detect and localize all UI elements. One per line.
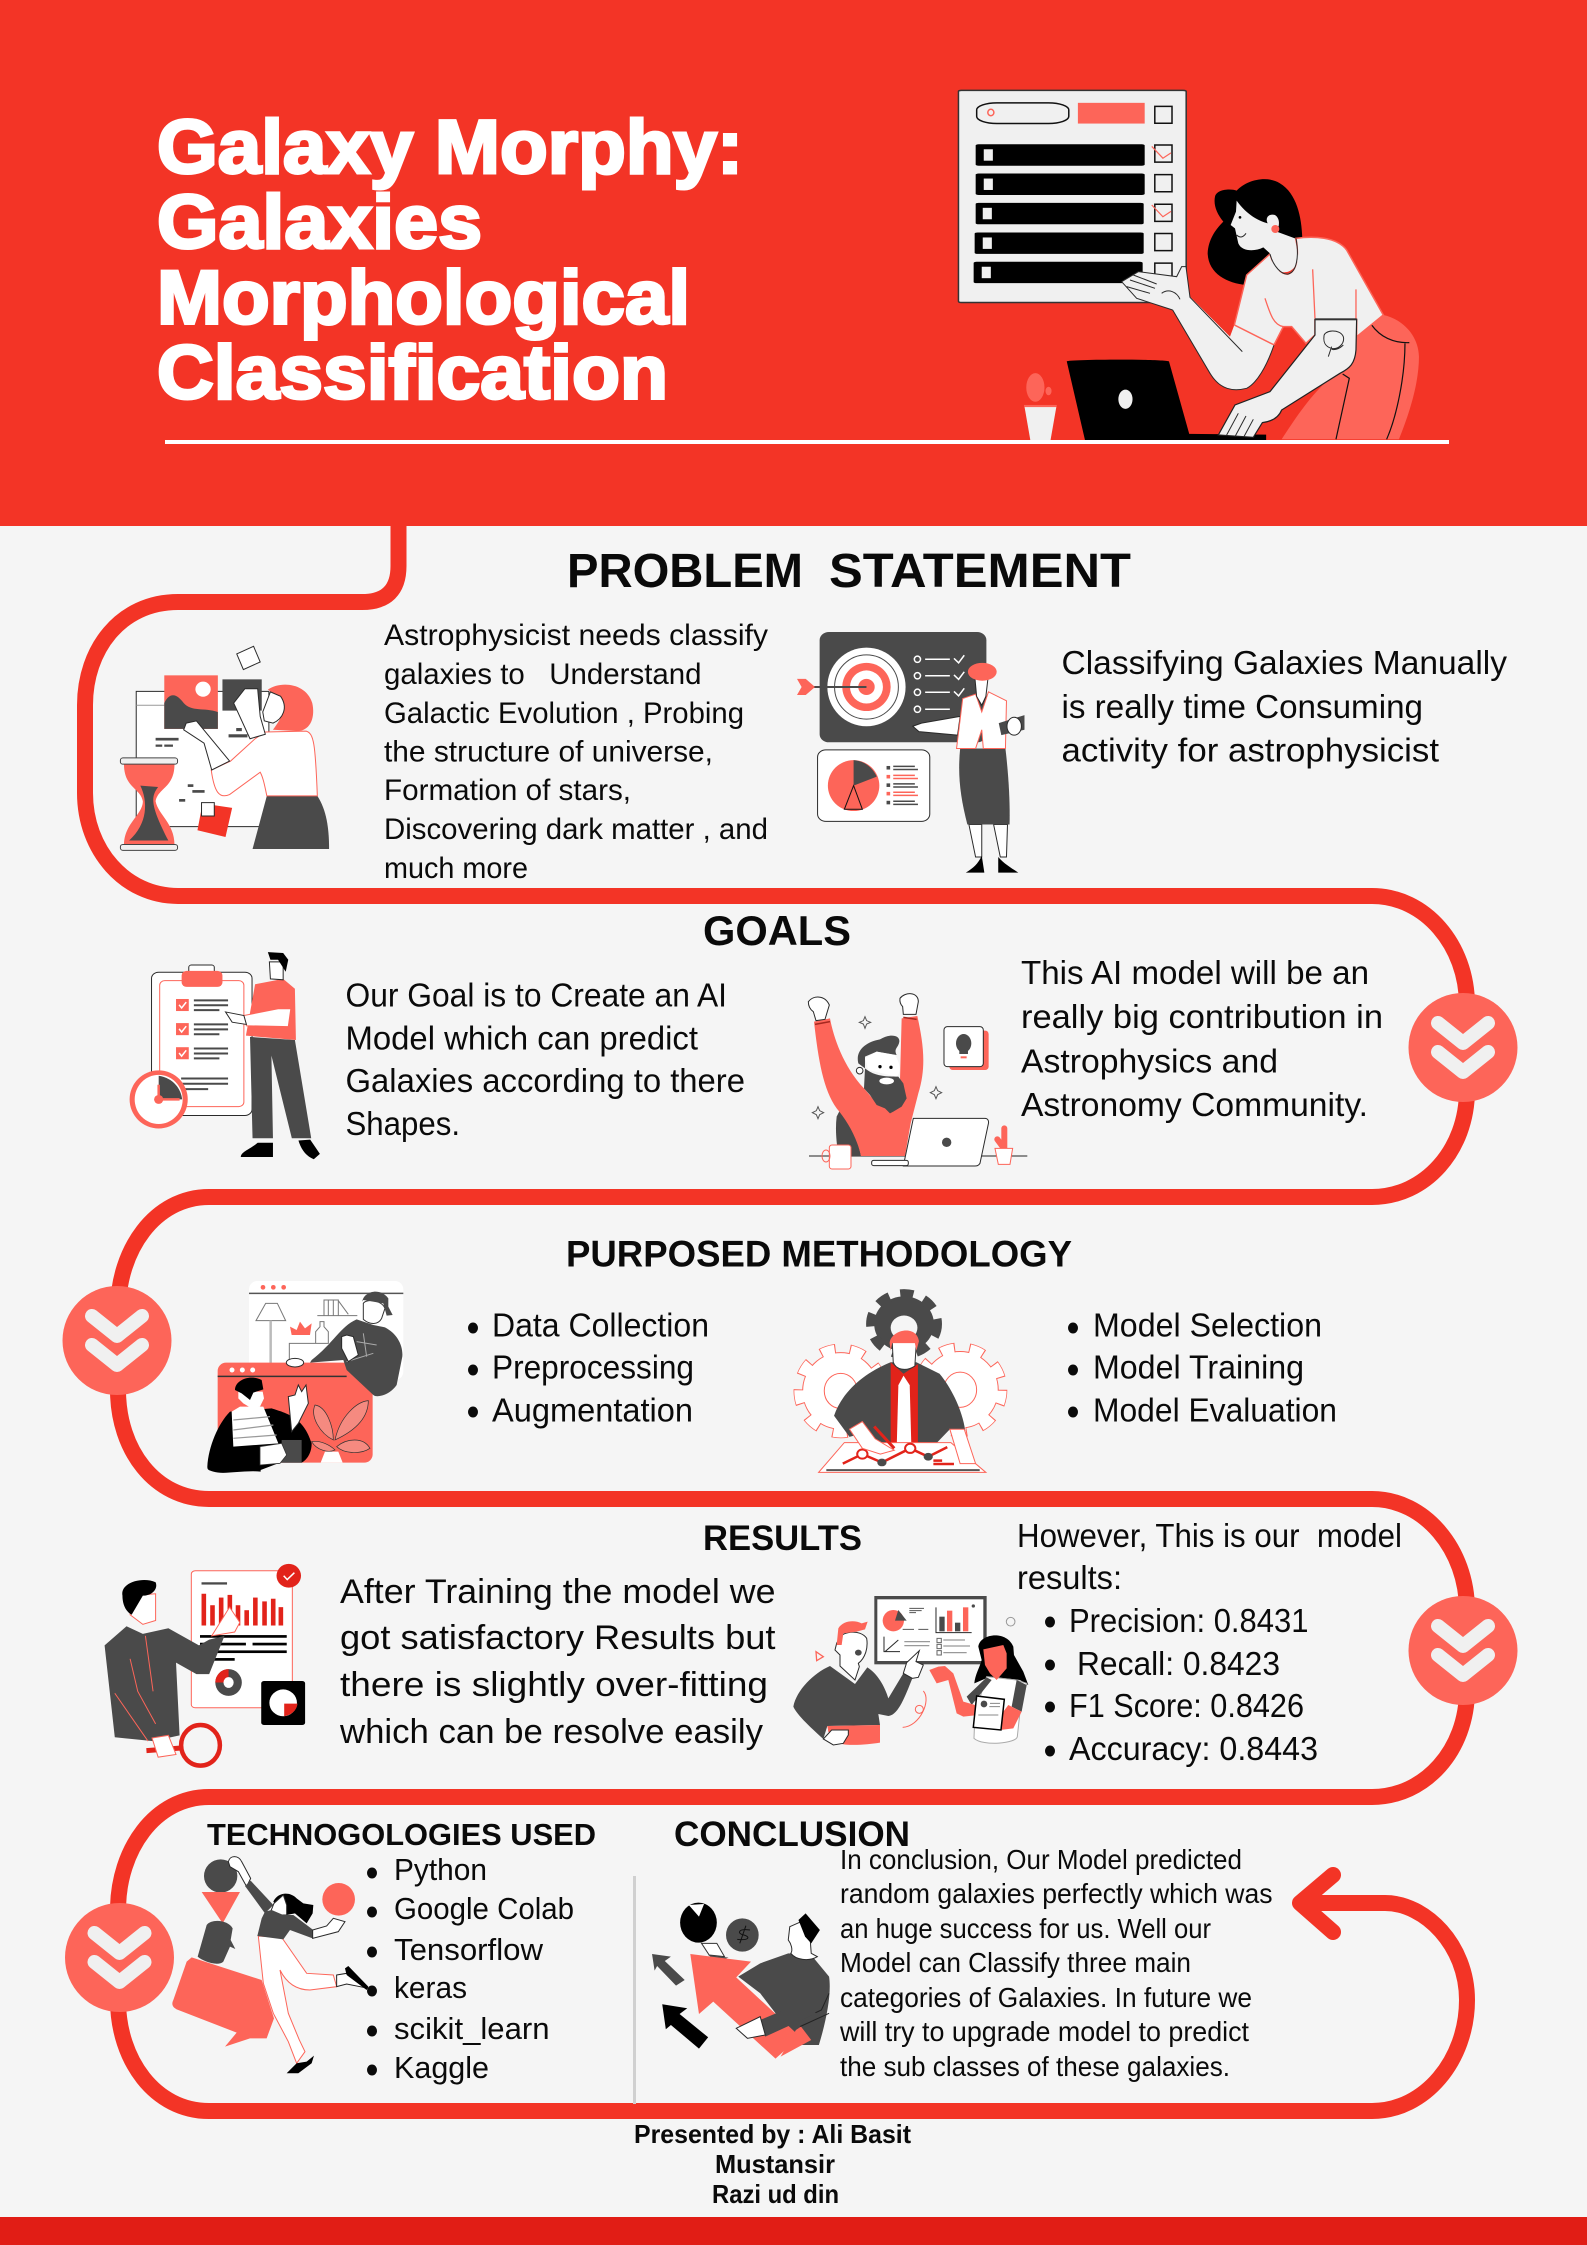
- metrics list: Accuracy: 0.8443: [1069, 1730, 1318, 1767]
- text: why classify: [384, 619, 768, 885]
- title: Classification: [157, 330, 668, 416]
- text: conclusion paragraph: the sub classes of these galaxies.: [840, 2051, 1230, 2082]
- list: technologies: Google Colab: [394, 1891, 574, 1926]
- text: conclusion paragraph: random galaxies perfectly which was: [840, 1878, 1272, 1909]
- panel: results: [105, 1517, 1402, 1767]
- text: conclusion paragraph: will try to upgrade model to predict: [839, 2016, 1249, 2047]
- list: data steps: Augmentation: [492, 1392, 693, 1428]
- metrics list: Precision: 0.8431: [1069, 1602, 1308, 1639]
- text: goal left: Model which can predict: [346, 1020, 698, 1056]
- serpentine timeline track: [85, 526, 1467, 2111]
- illustration: man with report and magnifier: [105, 1564, 305, 1766]
- text: why classify: Formation of stars,: [384, 774, 631, 807]
- badge: goals chevron: [1408, 993, 1518, 1102]
- header illustration: woman classifying a list at a laptop: [958, 90, 1419, 440]
- metrics list: [1017, 1517, 1402, 1767]
- text: manual classification problem: [1062, 644, 1507, 768]
- text: goal left: Shapes.: [346, 1105, 460, 1142]
- panel: conclusion: [652, 1815, 1272, 2082]
- heading: problem statement: PROBLEM: [567, 545, 803, 598]
- text: results summary: which can be resolve easily: [339, 1713, 763, 1751]
- heading: problem statement: [567, 545, 1131, 598]
- heading: problem statement: STATEMENT: [829, 545, 1131, 598]
- header rule: [165, 440, 1449, 444]
- badge: results chevron: [1408, 1596, 1518, 1705]
- heading: goals: GOALS: [703, 907, 851, 954]
- list: technologies: [367, 1852, 574, 2085]
- header band: [0, 0, 1587, 526]
- text: goal left: Our Goal is to Create an AI: [346, 976, 727, 1014]
- text: goal right: really big contribution in: [1021, 998, 1383, 1035]
- text: manual classification problem: activity for astrophysicist: [1062, 732, 1439, 768]
- illustration: celebrating bearded man at laptop: [808, 994, 1027, 1169]
- list: technologies: Kaggle: [394, 2050, 489, 2085]
- text: results summary: there is slightly over-fitting: [340, 1666, 768, 1704]
- text: why classify: the structure of universe,: [384, 736, 713, 768]
- divider between technologies and conclusion: [633, 1876, 636, 2104]
- text: manual classification problem: Classifying Galaxies Manually: [1062, 644, 1507, 681]
- illustration: man pointing at checklist clipboard with clock: [130, 952, 320, 1159]
- illustration: woman arranging images beside an hourglass: [120, 646, 329, 850]
- illustration: two people in video-call windows: [207, 1281, 403, 1473]
- illustration: engineer with gears drawing a chart: [800, 1294, 1001, 1472]
- text: conclusion paragraph: Model can Classify three main: [840, 1947, 1191, 1978]
- list: technologies: Tensorflow: [394, 1932, 544, 1967]
- text: goal right: [1021, 954, 1383, 1123]
- title: Galaxy Morphy:: [157, 105, 743, 190]
- heading: conclusion: CONCLUSION: [674, 1815, 910, 1854]
- presenters credit: Mustansir: [715, 2149, 835, 2179]
- list: model steps: Model Evaluation: [1093, 1392, 1337, 1428]
- text: conclusion paragraph: [839, 1844, 1272, 2082]
- arrow head: end of track: [1300, 1875, 1333, 1932]
- text: why classify: much more: [384, 852, 528, 885]
- footer band: [0, 2217, 1587, 2245]
- heading: purposed methodology: PURPOSED METHODOLOGY: [566, 1234, 1072, 1274]
- panel: problem statement: [120, 545, 1507, 885]
- panel: technologies used: [172, 1817, 596, 2085]
- text: conclusion paragraph: In conclusion, Our Model predicted: [840, 1844, 1242, 1875]
- text: results summary: [339, 1573, 776, 1751]
- title: [157, 105, 743, 416]
- text: goal right: Astronomy Community.: [1021, 1086, 1368, 1123]
- text: why classify: galaxies to Understand: [384, 658, 702, 691]
- metrics list: F1 Score: 0.8426: [1069, 1687, 1304, 1724]
- heading: results: RESULTS: [703, 1519, 862, 1558]
- list: model steps: Model Training: [1093, 1348, 1304, 1386]
- list panel: [958, 90, 1266, 440]
- list: technologies: Python: [394, 1852, 487, 1887]
- text: results summary: After Training the model we: [340, 1573, 776, 1611]
- list: data steps: Preprocessing: [492, 1348, 694, 1386]
- text: goal right: This AI model will be an: [1021, 954, 1369, 991]
- presenters credit: Presented by : Ali Basit: [634, 2119, 911, 2149]
- badge: methodology chevron: [62, 1286, 172, 1395]
- text: why classify: Discovering dark matter , and: [384, 813, 768, 846]
- illustration: man with upward arrows: [652, 1903, 830, 2059]
- metrics list: However, This is our model: [1017, 1517, 1402, 1554]
- title: Morphological: [157, 256, 690, 340]
- panel: goals: [130, 907, 1383, 1169]
- heading: technologies used: TECHNOGOLOGIES USED: [207, 1817, 596, 1852]
- text: goal right: Astrophysics and: [1021, 1042, 1278, 1080]
- text: conclusion paragraph: categories of Galaxies. In future we: [840, 1982, 1252, 2013]
- list: data steps: Data Collection: [492, 1306, 709, 1344]
- text: goal left: Galaxies according to there: [346, 1062, 745, 1099]
- metrics list: results:: [1017, 1559, 1122, 1596]
- list: model steps: [1068, 1306, 1337, 1428]
- presenters credit: [634, 2119, 911, 2209]
- metrics list: Recall: 0.8423: [1077, 1645, 1280, 1682]
- text: why classify: Galactic Evolution , Probing: [384, 697, 744, 730]
- text: conclusion paragraph: an huge success for us. Well our: [840, 1913, 1211, 1944]
- list: technologies: scikit_learn: [394, 2011, 550, 2046]
- text: why classify: Astrophysicist needs classify: [384, 619, 768, 652]
- illustration: presenter with target board and pie chart: [797, 632, 1024, 873]
- presenters credit: Razi ud din: [712, 2179, 839, 2209]
- list: data steps: [468, 1306, 709, 1428]
- illustration: two colleagues at a chart board: [793, 1596, 1028, 1745]
- panel: purposed methodology: [207, 1234, 1337, 1473]
- woman figure: [1122, 179, 1419, 439]
- list: technologies: keras: [394, 1970, 467, 2005]
- list: model steps: Model Selection: [1093, 1306, 1322, 1344]
- illustration: woman leaping among shapes: [172, 1857, 368, 2073]
- title: Galaxies: [157, 180, 482, 265]
- text: goal left: [346, 976, 745, 1142]
- text: manual classification problem: is really time Consuming: [1062, 688, 1423, 725]
- badge: technologies chevron: [65, 1903, 174, 2012]
- text: results summary: got satisfactory Results but: [340, 1619, 776, 1657]
